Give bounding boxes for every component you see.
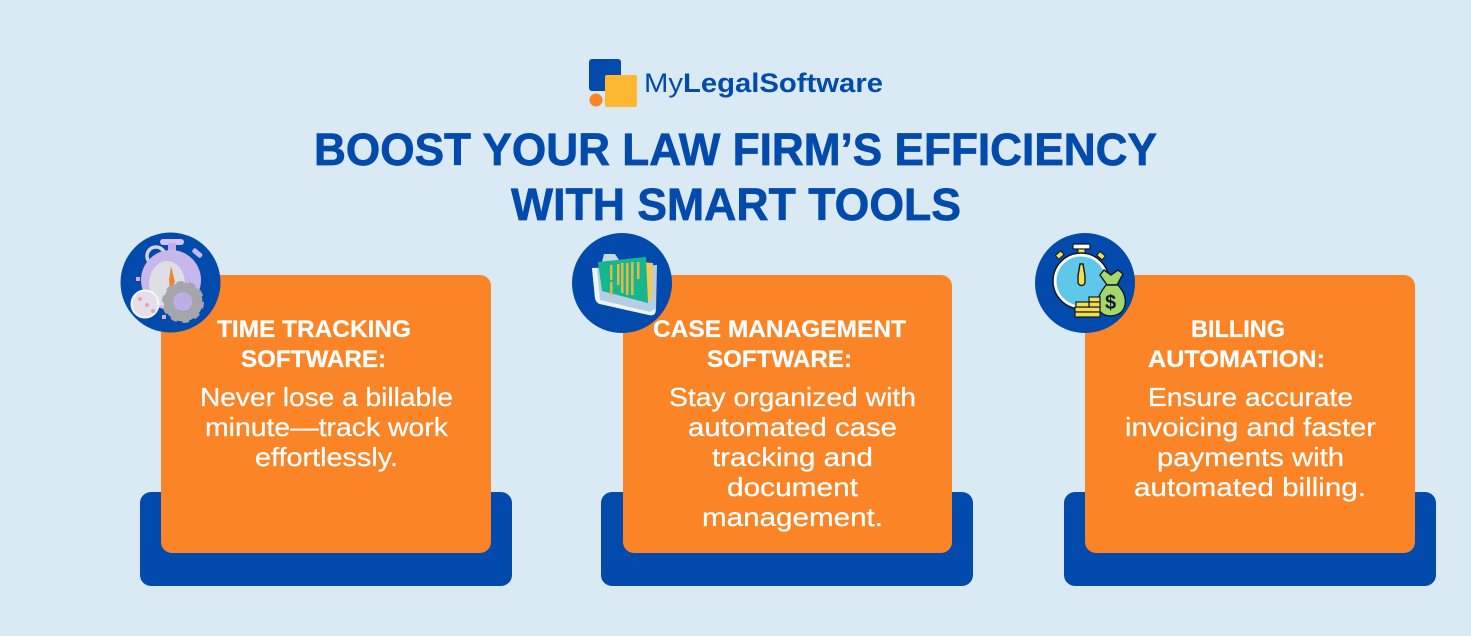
panel: billing automation [1035, 233, 1436, 586]
text: billing automation description: payments with [1157, 442, 1344, 472]
panel: time tracking software [120, 232, 512, 586]
title: WITH SMART TOOLS [511, 179, 961, 230]
title [314, 124, 1157, 230]
text: time tracking description: Never lose a billable [200, 382, 453, 412]
panel: case management software [572, 233, 973, 586]
text: billing automation description: automated billing. [1134, 472, 1366, 502]
heading: time tracking software [217, 316, 411, 373]
heading: case management software: SOFTWARE: [707, 346, 852, 373]
heading: billing automation: AUTOMATION: [1148, 346, 1325, 373]
icon: stopwatch and money bag: $ [1105, 292, 1116, 314]
text: case management description: management. [702, 502, 883, 532]
logo: MyLegalSoftware [589, 59, 883, 107]
card: time tracking [161, 275, 491, 553]
heading: time tracking software: TIME TRACKING [217, 316, 411, 343]
heading: billing automation [1148, 316, 1325, 373]
title: BOOST YOUR LAW FIRM’S EFFICIENCY [314, 124, 1157, 175]
text: time tracking description: effortlessly. [255, 442, 398, 472]
card: billing automation [1085, 275, 1415, 553]
icon: stopwatch and gears [120, 232, 220, 332]
heading: case management software: CASE MANAGEMENT [653, 316, 906, 343]
heading: billing automation: BILLING [1191, 316, 1285, 343]
icon: stopwatch and money bag [1035, 233, 1135, 333]
heading: time tracking software: SOFTWARE: [241, 346, 386, 373]
text: case management description: document [727, 472, 859, 502]
logo: MyLegalSoftware: MyLegalSoftware [644, 68, 883, 98]
icon: document folder [572, 233, 672, 333]
text: case management description [669, 382, 916, 532]
text: case management description: Stay organized with [669, 382, 916, 412]
text: billing automation description: Ensure accurate [1148, 382, 1353, 412]
heading: case management software [653, 316, 906, 373]
text: case management description: tracking and [712, 442, 873, 472]
text: time tracking description [200, 382, 453, 472]
text: billing automation description [1125, 382, 1376, 502]
text: billing automation description: invoicing and faster [1125, 412, 1376, 442]
card base: billing automation [1064, 492, 1436, 586]
card base: time tracking [140, 492, 512, 586]
card base: case management [601, 492, 973, 586]
card: case management [623, 275, 952, 553]
text: time tracking description: minute—track work [205, 412, 449, 442]
text: case management description: automated case [688, 412, 897, 442]
